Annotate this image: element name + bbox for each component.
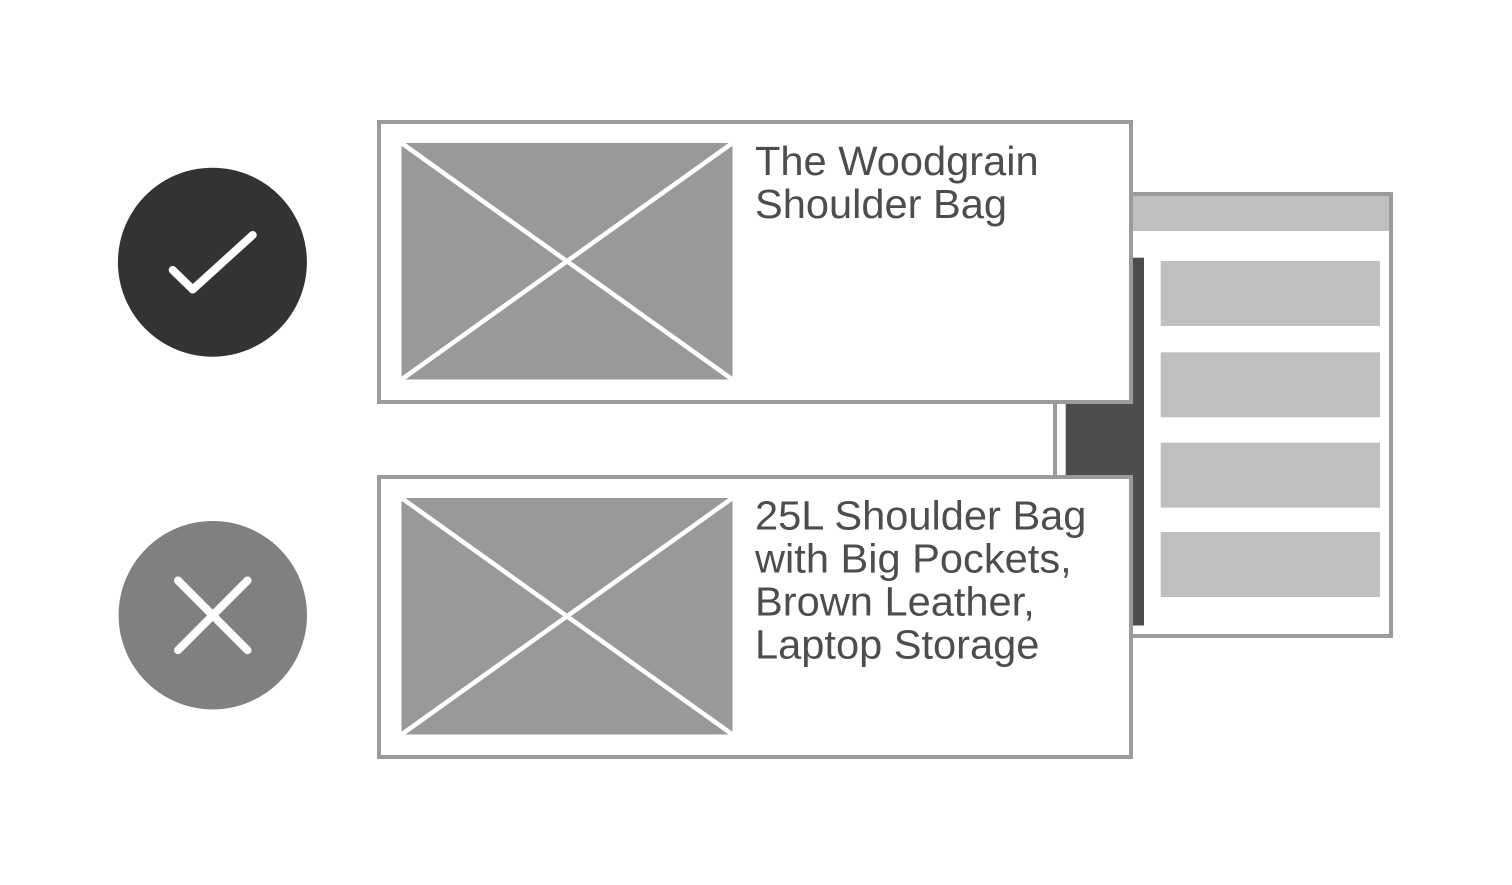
- good product card: [379, 122, 1131, 402]
- list row 3: [1161, 443, 1380, 508]
- background page wireframe: [1055, 194, 1391, 636]
- product title: The Woodgrain: [755, 138, 1039, 184]
- image placeholder: [402, 143, 732, 380]
- bad product card: [379, 477, 1131, 757]
- product title: with Big Pockets,: [754, 536, 1072, 581]
- product title: 25L Shoulder Bag: [755, 493, 1086, 538]
- page header bar: [1057, 196, 1389, 231]
- product title: Laptop Storage: [755, 622, 1039, 667]
- image placeholder: [402, 498, 732, 734]
- product title: Shoulder Bag: [755, 181, 1007, 227]
- list row 4: [1161, 532, 1380, 597]
- list row 2: [1161, 352, 1380, 417]
- icon: cross mark: [119, 521, 307, 709]
- list row 1: [1161, 261, 1380, 326]
- product title: Brown Leather,: [755, 579, 1035, 624]
- dark sidebar: [1066, 258, 1144, 626]
- icon: check mark: [118, 168, 307, 357]
